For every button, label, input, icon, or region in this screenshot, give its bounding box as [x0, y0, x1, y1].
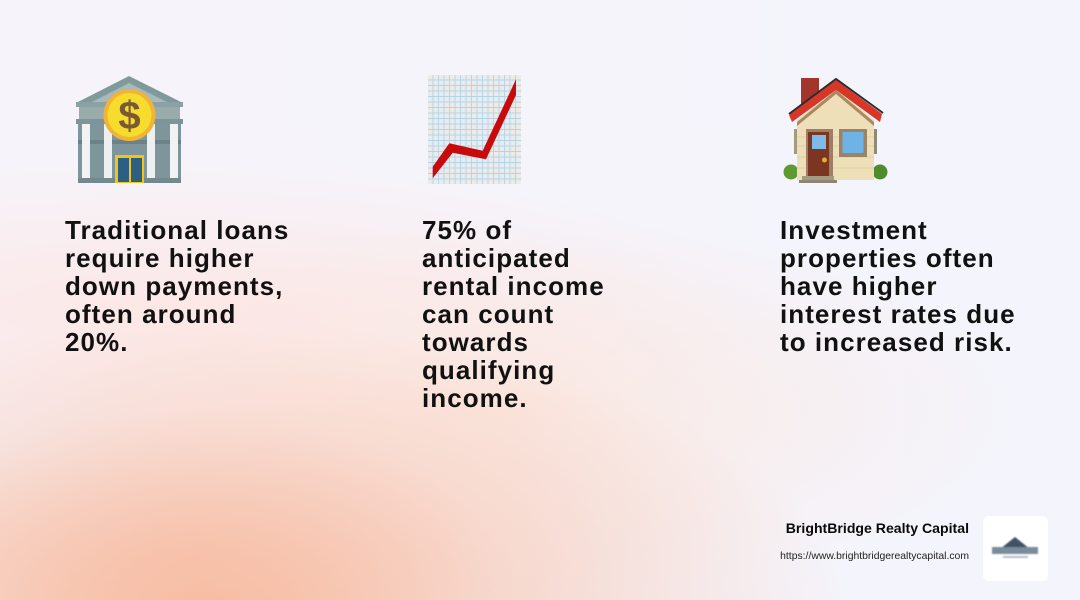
text block: investment properties: properties often [780, 243, 995, 273]
text block: rental income [422, 215, 605, 413]
text block: traditional loans: often around [65, 299, 236, 329]
text block: traditional loans: 20%. [65, 327, 128, 357]
text block: traditional loans [65, 215, 289, 357]
text block: rental income: anticipated [422, 243, 571, 273]
logo card [983, 516, 1048, 581]
footer url: https://www.brightbridgerealtycapital.com [780, 551, 969, 562]
text block: rental income: qualifying [422, 355, 555, 385]
icon: bank with dollar coin [76, 76, 183, 183]
text block: rental income: rental income [422, 271, 605, 301]
text block: traditional loans: require higher [65, 243, 255, 273]
text block: investment properties: have higher [780, 271, 937, 301]
icon: logo [991, 536, 1039, 559]
text block: rental income: 75% of [422, 215, 512, 245]
text block: investment properties: to increased risk. [780, 327, 1013, 357]
text block: investment properties [780, 215, 1016, 357]
footer brand name: BrightBridge Realty Capital [786, 520, 969, 536]
text block: rental income: income. [422, 383, 528, 413]
icon: chart with upward trend [428, 75, 521, 184]
text block: investment properties: interest rates due [780, 299, 1016, 329]
text block: investment properties: Investment [780, 215, 928, 245]
text block: rental income: towards [422, 327, 529, 357]
text block: rental income: can count [422, 299, 554, 329]
dollar sign: $ [118, 94, 141, 138]
text block: traditional loans: Traditional loans [65, 215, 289, 245]
icon: house [784, 78, 888, 183]
text block: traditional loans: down payments, [65, 271, 283, 301]
